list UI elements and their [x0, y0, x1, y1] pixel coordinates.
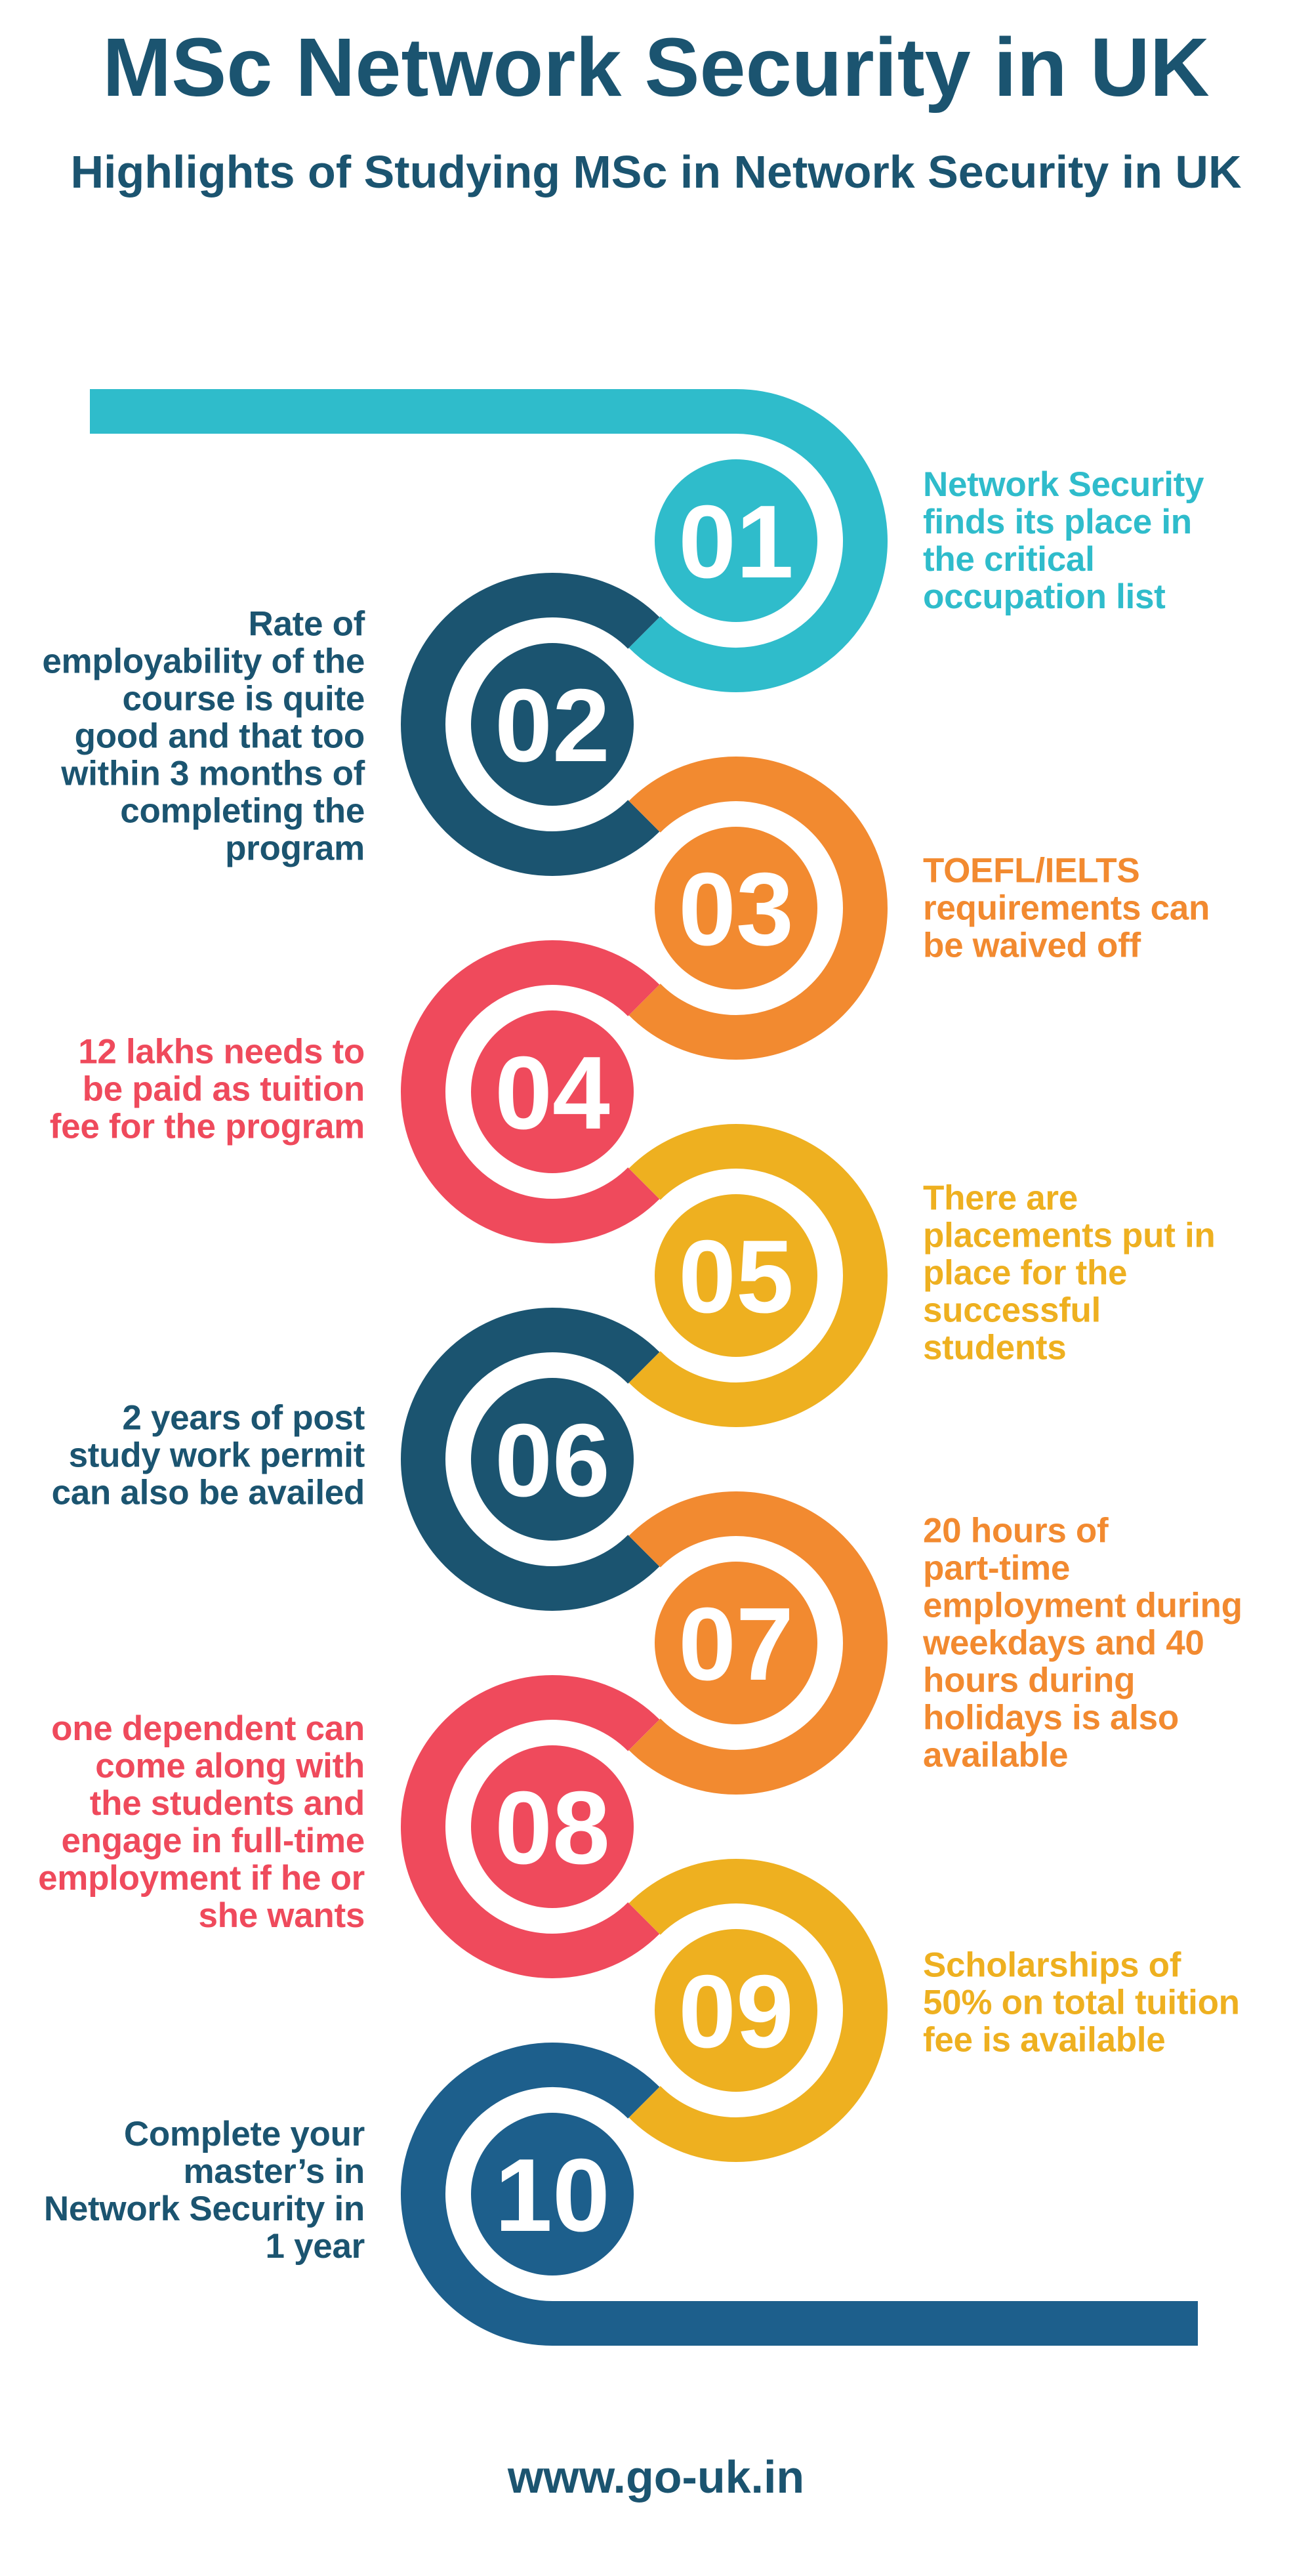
- text 02: completing the: [120, 791, 365, 831]
- title: MSc Network Security in UK: [102, 21, 1210, 114]
- footer url: www.go-uk.in: [508, 2451, 804, 2503]
- text 01: occupation list: [923, 577, 1165, 616]
- text 05: [923, 1178, 1215, 1367]
- step 06 ring and number: [423, 1330, 644, 1589]
- text 05: placements put in: [923, 1216, 1215, 1255]
- step 03 ring and number: 03: [678, 852, 794, 967]
- text 08: she wants: [198, 1896, 365, 1935]
- text 07: weekdays and 40: [923, 1623, 1204, 1663]
- step 06 ring and number: 06: [495, 1403, 610, 1518]
- text 07: 20 hours of: [923, 1512, 1108, 1550]
- step 10 ring and number: [423, 2065, 1198, 2323]
- text 01: finds its place in: [923, 503, 1192, 541]
- step 05 ring and number: 05: [678, 1219, 794, 1335]
- step 08 ring and number: [423, 1697, 644, 1956]
- text 07: hours during: [923, 1661, 1135, 1699]
- text 10: master’s in: [183, 2152, 365, 2191]
- text 09: 50% on total tuition: [923, 1983, 1240, 2022]
- step 07 ring and number: [645, 1514, 865, 1772]
- text 08: [38, 1709, 365, 1935]
- step 05 ring and number: [645, 1146, 865, 1405]
- text 04: [50, 1033, 365, 1146]
- text 06: study work permit: [69, 1436, 365, 1475]
- step 04 ring and number: [423, 963, 644, 1221]
- text 10: Complete your: [124, 2115, 365, 2153]
- subtitle: Highlights of Studying MSc in Network Security in UK: [70, 146, 1242, 197]
- text 08: come along with: [95, 1747, 365, 1785]
- text 10: 1 year: [266, 2227, 365, 2266]
- text 04: be paid as tuition: [83, 1070, 365, 1109]
- step 04 ring and number: 04: [495, 1035, 610, 1151]
- text 10: Network Security in: [44, 2190, 365, 2228]
- text 07: holidays is also: [923, 1698, 1179, 1737]
- step 08 ring and number: 08: [495, 1770, 610, 1886]
- text 05: students: [923, 1328, 1066, 1367]
- step 01 ring and number: 01: [678, 484, 794, 600]
- text 07: part-time: [923, 1548, 1070, 1588]
- text 05: successful: [923, 1291, 1101, 1329]
- text 01: the critical: [923, 540, 1095, 579]
- text 08: the students and: [90, 1784, 365, 1823]
- text 06: [52, 1399, 365, 1512]
- text 09: fee is available: [923, 2021, 1165, 2059]
- text 07: employment during: [923, 1587, 1242, 1625]
- text 01: [923, 465, 1204, 616]
- step 02 ring and number: 02: [495, 668, 610, 783]
- text 08: engage in full-time: [61, 1821, 365, 1860]
- step 09 ring and number: 09: [678, 1954, 794, 2069]
- step 03 ring and number: [645, 779, 865, 1037]
- text 01: Network Security: [923, 465, 1204, 504]
- text 07: [922, 1512, 1242, 1774]
- text 06: can also be availed: [52, 1474, 365, 1512]
- text 04: fee for the program: [50, 1108, 365, 1146]
- text 09: Scholarships of: [923, 1946, 1181, 1984]
- text 02: Rate of: [248, 605, 365, 643]
- text 07: available: [923, 1736, 1068, 1774]
- text 02: within 3 months of: [61, 755, 365, 793]
- text 02: program: [225, 829, 365, 867]
- text 03: requirements can: [923, 888, 1210, 928]
- step 10 ring and number: 10: [495, 2138, 610, 2253]
- text 05: place for the: [923, 1253, 1127, 1293]
- text 02: [42, 605, 365, 867]
- text 03: be waived off: [923, 926, 1141, 965]
- text 03: [923, 852, 1210, 965]
- text 02: good and that too: [75, 717, 365, 756]
- text 10: [44, 2115, 365, 2266]
- text 02: course is quite: [122, 680, 365, 718]
- text 02: employability of the: [42, 642, 365, 681]
- step 01 ring and number: [90, 411, 865, 670]
- text 09: [923, 1946, 1240, 2059]
- step 02 ring and number: [423, 595, 644, 854]
- text 04: 12 lakhs needs to: [78, 1033, 365, 1071]
- text 06: 2 years of post: [122, 1399, 365, 1437]
- step 09 ring and number: [645, 1881, 865, 2140]
- text 05: There are: [923, 1178, 1078, 1218]
- step 07 ring and number: 07: [678, 1587, 794, 1702]
- text 08: one dependent can: [51, 1709, 365, 1748]
- text 08: employment if he or: [38, 1859, 365, 1898]
- text 03: TOEFL/IELTS: [923, 852, 1139, 890]
